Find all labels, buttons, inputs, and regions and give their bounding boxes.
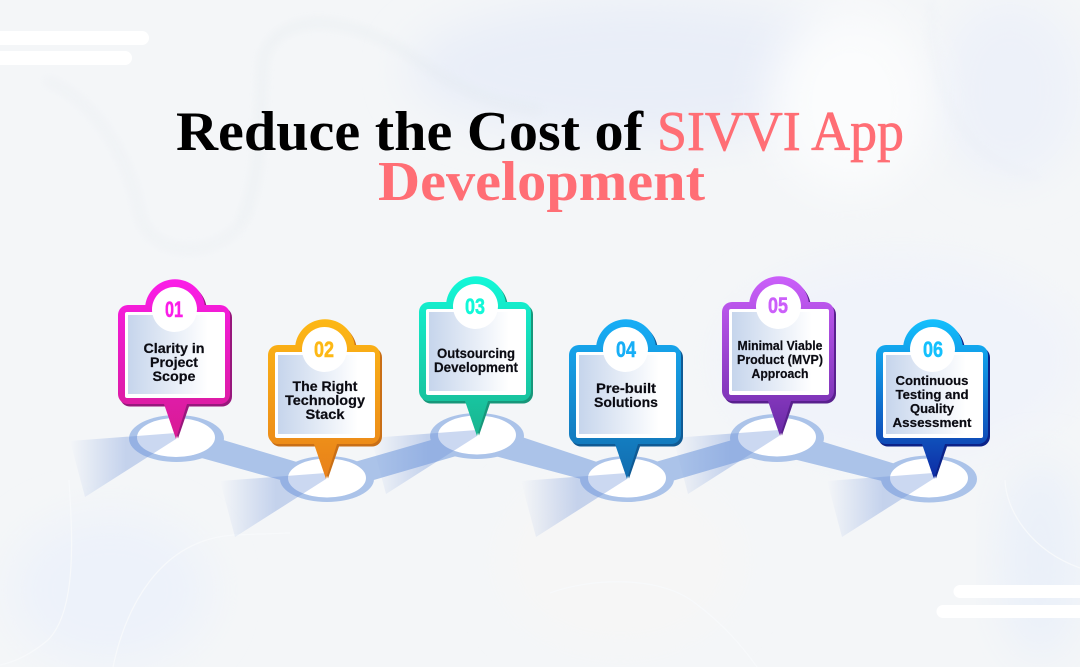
pin 06: Continuous Testing and Quality Assessment: Testing and xyxy=(896,388,968,402)
pin 04: Pre-built Solutions: Pre-built xyxy=(596,381,657,396)
decorative bars: top left xyxy=(0,31,149,65)
title: Development xyxy=(378,151,705,213)
pin 02: The Right Technology Stack: Stack xyxy=(306,407,345,422)
title xyxy=(176,101,904,213)
pin 02: The Right Technology Stack xyxy=(268,319,382,479)
pin 01: Clarity in Project Scope: Clarity in xyxy=(144,341,204,356)
pin 01: Clarity in Project Scope: Scope xyxy=(152,369,196,384)
pin 06: Continuous Testing and Quality Assessment: 06 xyxy=(923,337,943,362)
pin 01: Clarity in Project Scope: 01 xyxy=(165,297,183,322)
pin 01: Clarity in Project Scope xyxy=(118,279,232,439)
pin 02: The Right Technology Stack: Technology xyxy=(285,393,366,408)
pin 03: Outsourcing Development: 03 xyxy=(465,294,485,319)
pin 06: Continuous Testing and Quality Assessment: Assessment xyxy=(892,416,972,430)
decorative bars: bottom right xyxy=(937,585,1080,618)
pin 03: Outsourcing Development: Outsourcing xyxy=(437,346,515,361)
pin 02: The Right Technology Stack: The Right xyxy=(292,379,358,394)
pin 05: Minimal Viable Product (MVP) Approach: Approach xyxy=(752,367,808,381)
pin 03: Outsourcing Development: Development xyxy=(434,360,518,375)
pin 05: Minimal Viable Product (MVP) Approach: Product (MVP) xyxy=(737,353,823,367)
pin 02: The Right Technology Stack: 02 xyxy=(314,337,334,362)
pin 03: Outsourcing Development xyxy=(419,276,533,436)
pin 05: Minimal Viable Product (MVP) Approach xyxy=(722,276,836,436)
pin 06: Continuous Testing and Quality Assessment: Quality xyxy=(910,402,954,416)
title: Reduce the Cost of xyxy=(176,101,644,163)
pin 01: Clarity in Project Scope: Project xyxy=(150,355,199,370)
path connectors xyxy=(180,431,912,486)
title: SIVVI App xyxy=(657,101,904,163)
pin 06: Continuous Testing and Quality Assessment xyxy=(876,319,990,479)
pin 06: Continuous Testing and Quality Assessment: Continuous xyxy=(896,374,969,388)
pin 04: Pre-built Solutions: Solutions xyxy=(594,395,658,410)
pin 04: Pre-built Solutions xyxy=(569,319,683,479)
pin 05: Minimal Viable Product (MVP) Approach: 05 xyxy=(768,293,788,318)
pin shadows xyxy=(70,430,933,537)
pin 05: Minimal Viable Product (MVP) Approach: Minimal Viable xyxy=(738,339,823,353)
pin 04: Pre-built Solutions: 04 xyxy=(616,337,637,362)
stepping discs xyxy=(129,413,977,502)
